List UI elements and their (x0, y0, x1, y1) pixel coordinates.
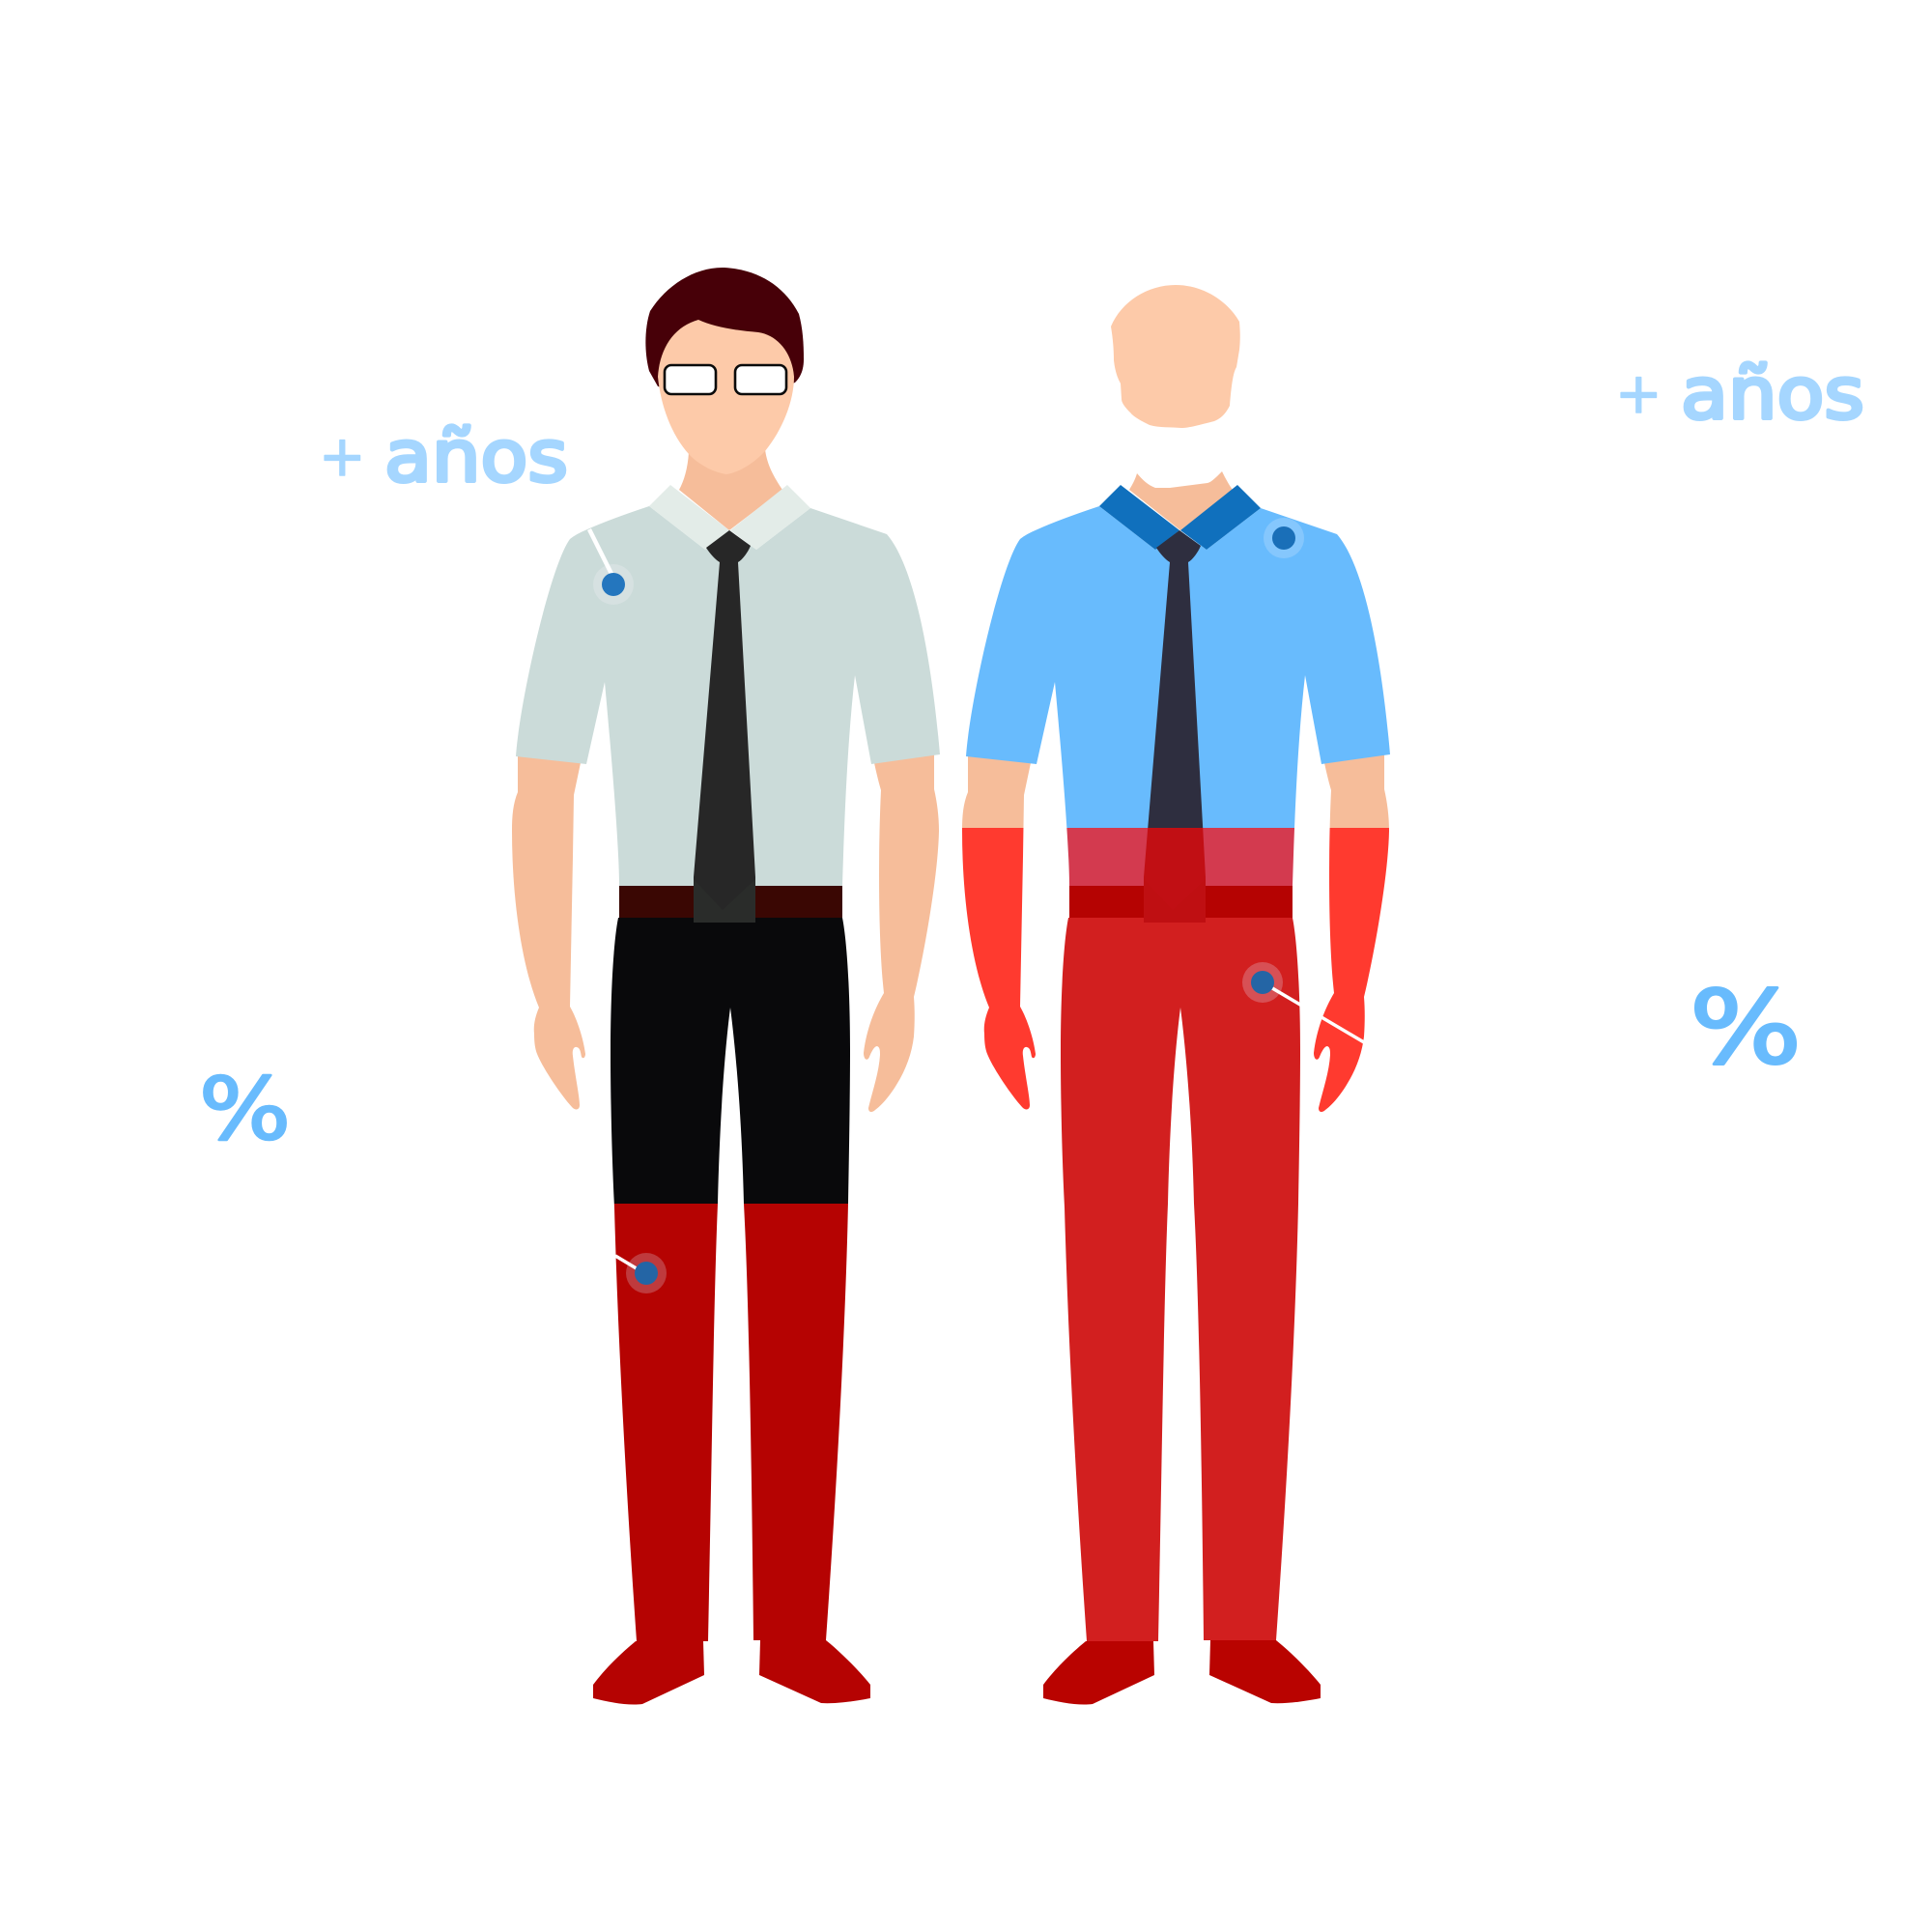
left shoe (593, 1641, 704, 1705)
label: + años left (319, 415, 568, 498)
belt (619, 886, 842, 918)
hair (645, 268, 804, 406)
face (658, 320, 794, 474)
right shoe (759, 1640, 870, 1703)
label: + años right: años (1681, 353, 1864, 436)
label: + años left: años (384, 415, 568, 498)
tie end (694, 879, 755, 923)
belt (1069, 886, 1293, 918)
label: + años right: + (1615, 360, 1662, 426)
neck (1129, 471, 1233, 530)
shirt (966, 506, 1390, 886)
callout marker: leg (615, 1253, 667, 1293)
tie (694, 530, 755, 910)
trousers (611, 918, 850, 1641)
label: percent right: % (1690, 969, 1802, 1087)
label: + años left: + (319, 423, 366, 489)
left arm (962, 749, 1036, 1109)
label: + años right (1615, 353, 1864, 436)
collar (1099, 485, 1261, 550)
label: percent left: % (199, 1060, 291, 1159)
figure: man with hair and glasses (512, 268, 940, 1705)
left shoe (1043, 1641, 1154, 1705)
callout marker: hip (1242, 962, 1364, 1042)
right arm (864, 749, 939, 1112)
shirt (516, 506, 940, 886)
tie end (1144, 879, 1206, 923)
figure: bald man in blue shirt (962, 285, 1390, 1705)
callout marker: shoulder (589, 529, 634, 605)
callout marker: shoulder (1264, 518, 1304, 558)
head (1111, 285, 1240, 428)
right shoe (1209, 1640, 1321, 1703)
glasses (665, 365, 786, 394)
tie (1144, 530, 1206, 910)
left arm (512, 749, 585, 1109)
trousers (1061, 918, 1300, 1641)
collar (649, 485, 810, 550)
neck (679, 449, 782, 530)
right arm (1314, 749, 1389, 1112)
